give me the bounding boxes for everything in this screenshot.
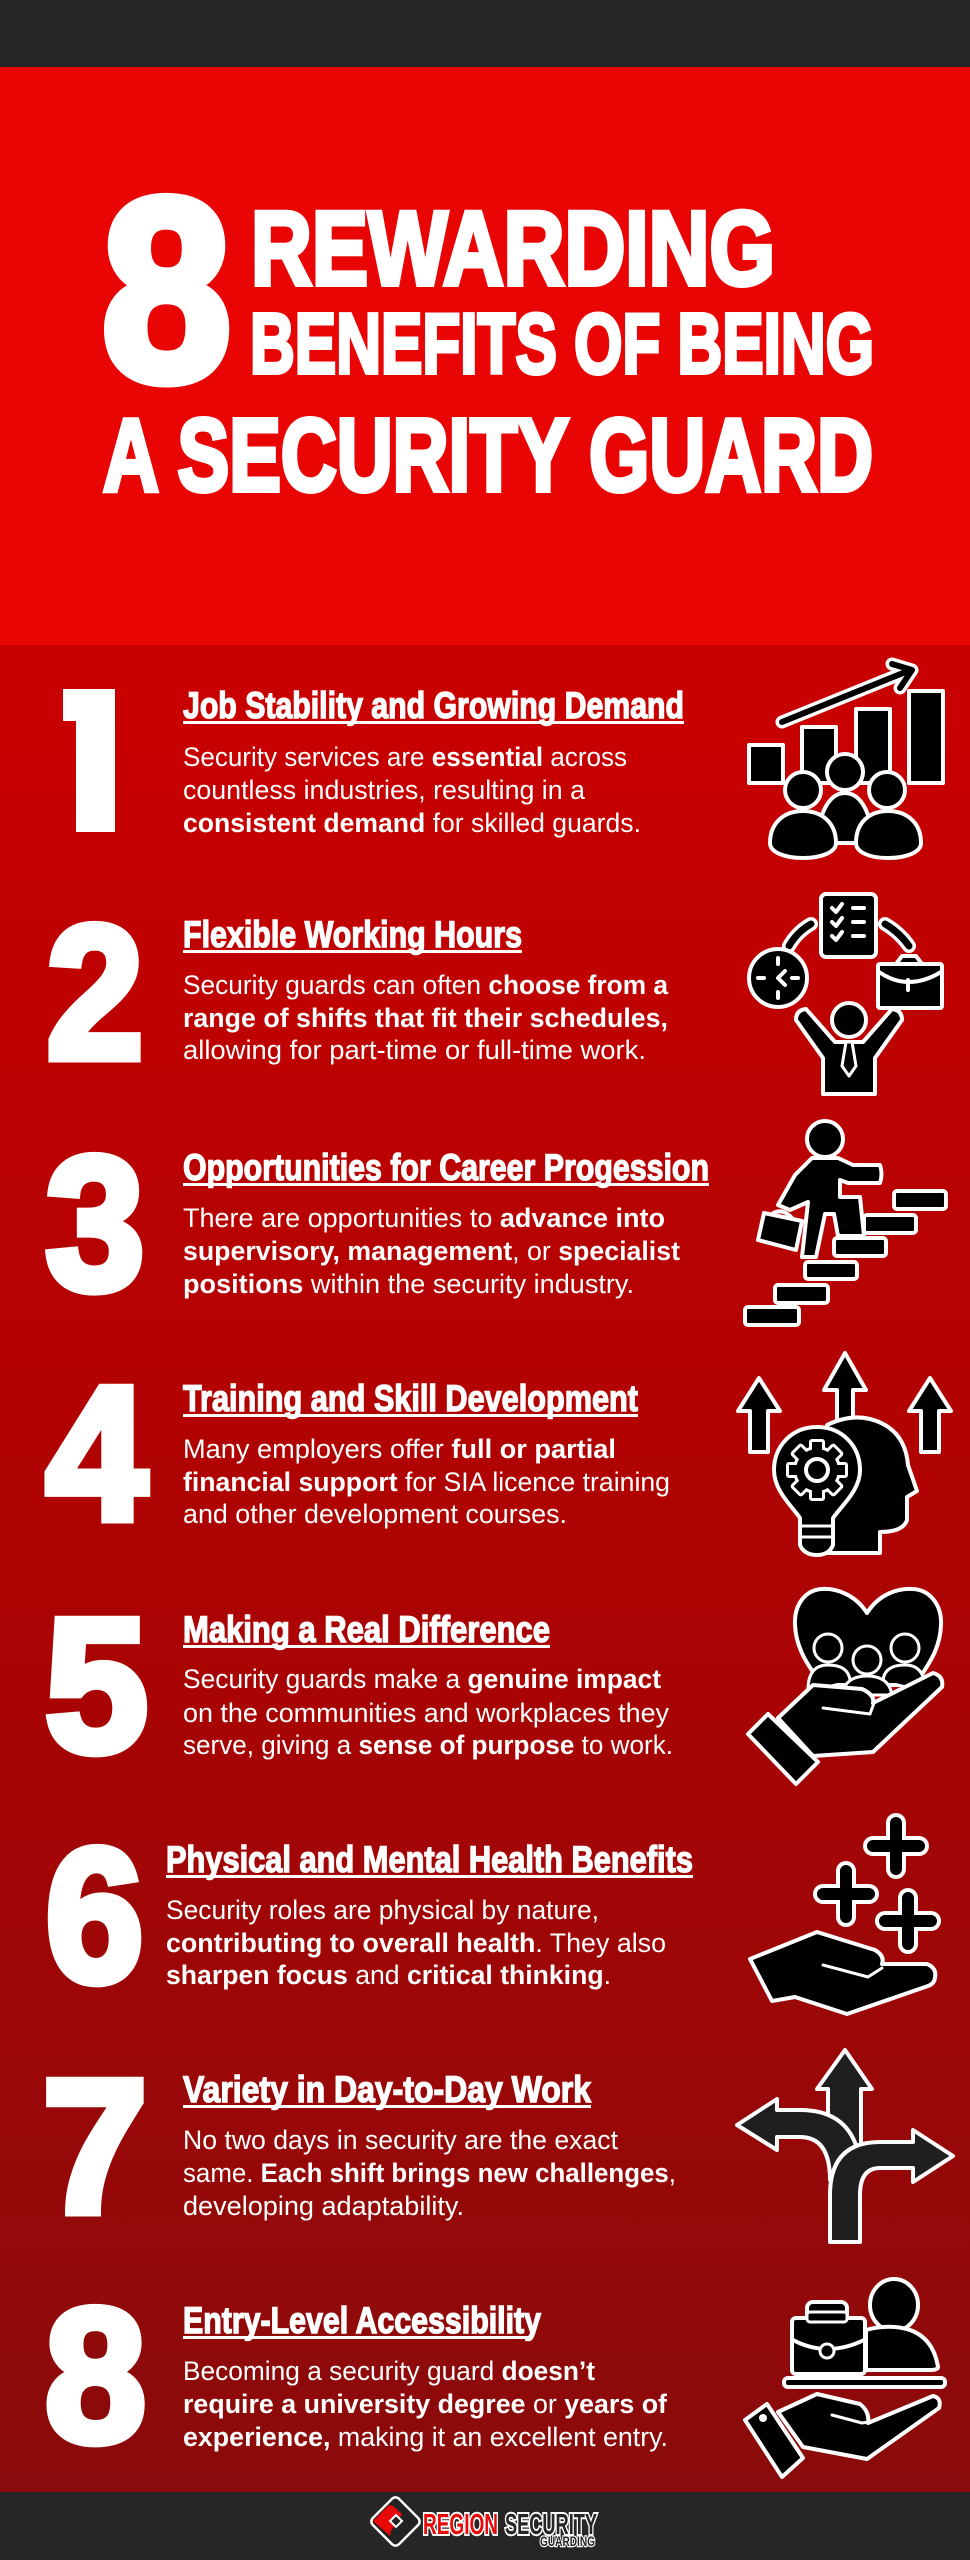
body 7: same. Each shift brings new challenges, (183, 2158, 676, 2188)
header panel background (0, 67, 970, 645)
body 7: developing adaptability. (183, 2191, 464, 2221)
body 8: require a university degree or years of (183, 2389, 668, 2419)
heading 2: Flexible Working Hours (183, 914, 522, 955)
title (102, 145, 874, 512)
icon: growth chart and team (749, 664, 943, 858)
body 4: financial support for SIA licence training (183, 1467, 670, 1497)
body 2: allowing for part-time or full-time work. (183, 1035, 646, 1065)
body 6 (166, 1895, 666, 1990)
body 4 (183, 1434, 670, 1529)
panel: benefit 4 (46, 1348, 951, 1560)
logo wordmark: REGION (423, 2509, 498, 2541)
heading 7: Variety in Day-to-Day Work (183, 2069, 591, 2110)
body 5: serve, giving a sense of purpose to work. (183, 1730, 673, 1760)
heading 3: Opportunities for Career Progession (183, 1147, 709, 1188)
panel: benefit 7 (42, 2041, 953, 2253)
body 2 (183, 970, 669, 1065)
heading 6: Physical and Mental Health Benefits (166, 1839, 693, 1880)
panel: benefit 1 (41, 657, 943, 869)
number 1 (63, 689, 115, 832)
icon: hand with health plus signs (750, 1823, 935, 2014)
body 7 (183, 2125, 676, 2221)
heading 5: Making a Real Difference (183, 1609, 550, 1650)
body 5: Security guards make a genuine impact (183, 1664, 661, 1694)
number 1: 1 (41, 657, 147, 869)
footer bar (0, 2492, 970, 2560)
panel: benefit 6 (46, 1810, 935, 2022)
body 1: consistent demand for skilled guards. (183, 808, 641, 838)
number 2: 2 (46, 887, 144, 1099)
heading 8: Entry-Level Accessibility (183, 2300, 541, 2341)
panel: benefit 5 (45, 1580, 942, 1792)
icon: job and person on hand (745, 2279, 945, 2477)
body 5: on the communities and workplaces they (183, 1698, 669, 1728)
body 2: Security guards can often choose from a (183, 970, 669, 1000)
icon: skills head and bulb (738, 1353, 951, 1555)
logo (369, 2495, 597, 2549)
body 8: experience, making it an excellent entry. (183, 2422, 668, 2452)
icon: heart and community in hand (748, 1589, 942, 1784)
benefits panel background (0, 645, 970, 2492)
logo mark (369, 2495, 422, 2548)
top dark bar (0, 0, 970, 67)
body 2: range of shifts that fit their schedules, (183, 1003, 668, 1033)
body 1: countless industries, resulting in a (183, 775, 586, 805)
number 6: 6 (46, 1810, 144, 2022)
title: REWARDING (251, 190, 775, 308)
body 6: sharpen focus and critical thinking. (166, 1960, 611, 1990)
body 8: Becoming a security guard doesn’t (183, 2356, 595, 2386)
number 4: 4 (46, 1348, 147, 1560)
body 4: and other development courses. (183, 1499, 567, 1529)
body 3: supervisory, management, or specialist (183, 1236, 680, 1266)
panel: benefit 2 (46, 887, 942, 1099)
heading 1: Job Stability and Growing Demand (183, 685, 684, 726)
panel: benefit 8 (45, 2270, 945, 2482)
number 3: 3 (46, 1118, 144, 1330)
heading 4: Training and Skill Development (183, 1378, 638, 1419)
body 6: Security roles are physical by nature, (166, 1895, 599, 1925)
number 7: 7 (42, 2041, 148, 2253)
body 6: contributing to overall health. They also (166, 1928, 666, 1958)
icon: climbing career stairs (745, 1121, 946, 1325)
logo wordmark (423, 2509, 597, 2549)
logo wordmark: GUARDING (540, 2533, 595, 2549)
body 5 (183, 1664, 673, 1760)
number 8: 8 (45, 2270, 146, 2482)
body 3 (183, 1203, 680, 1299)
body 3: There are opportunities to advance into (183, 1203, 665, 1233)
panel: benefit 3 (46, 1118, 946, 1330)
body 3: positions within the security industry. (183, 1269, 634, 1299)
body 7: No two days in security are the exact (183, 2125, 618, 2155)
title: 8 (102, 145, 231, 434)
icon: flexible schedule person (749, 894, 942, 1094)
logo wordmark: SECURITY (505, 2509, 597, 2541)
body 1 (183, 742, 641, 838)
number 5: 5 (45, 1580, 148, 1792)
body 1: Security services are essential across (183, 742, 627, 772)
icon: three-way direction arrows (737, 2050, 953, 2242)
body 8 (183, 2356, 668, 2452)
body 4: Many employers offer full or partial (183, 1434, 616, 1464)
